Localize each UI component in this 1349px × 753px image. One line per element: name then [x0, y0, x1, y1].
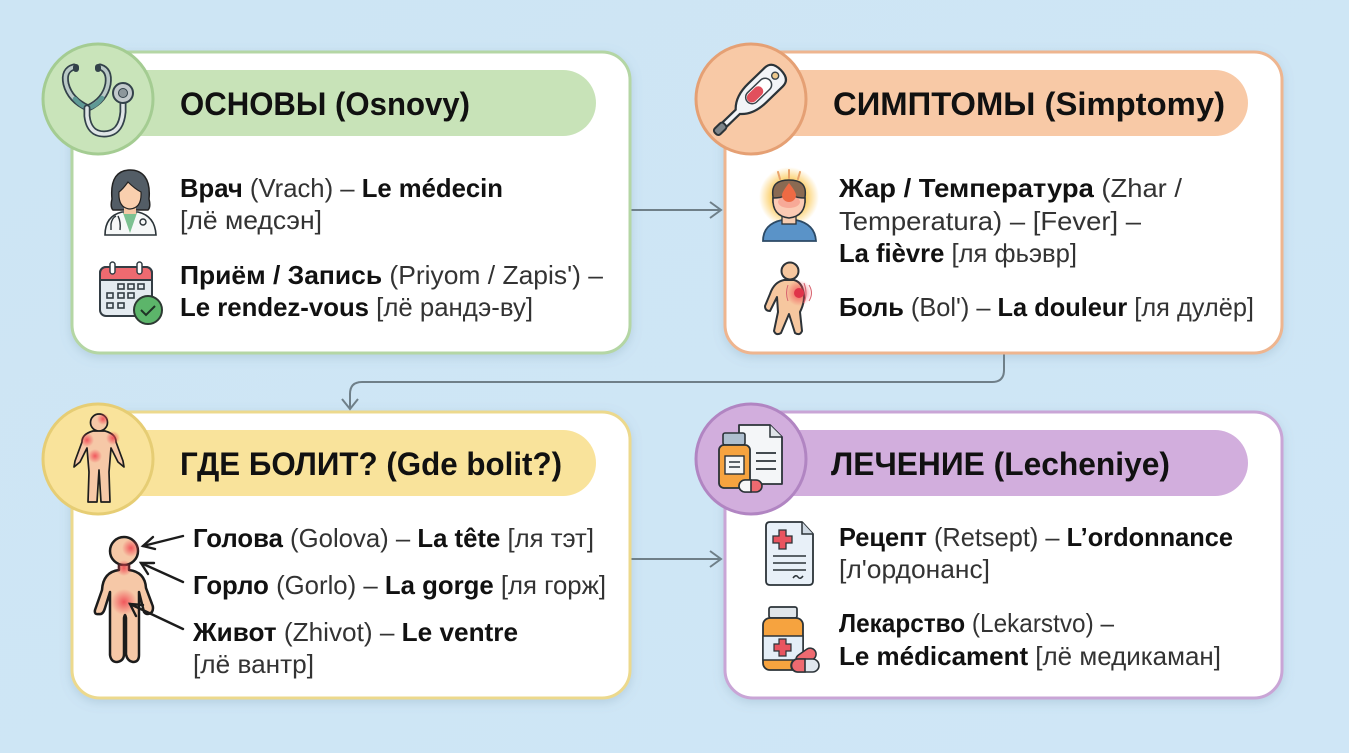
text: appointment: Приём / Запись (Priyom / Zapis') – [180, 260, 604, 290]
text: fever line 3: La fièvre [ля фьэвр] [839, 238, 1077, 268]
icon: medicine bottle and pills [763, 607, 819, 672]
heading band: where does it hurt [100, 430, 596, 496]
text: head: Голова (Golova) – La tête [ля тэт] [193, 523, 594, 553]
heading band: symptoms [753, 70, 1248, 136]
text: fever: Жар / Температура (Zhar / [838, 173, 1183, 203]
icon: calendar [100, 262, 162, 324]
text: stomach: Живот (Zhivot) – Le ventre [192, 617, 518, 647]
icon badge: body map [43, 404, 153, 514]
text: doctor: Врач (Vrach) – Le médecin [180, 173, 503, 203]
icon: fever [759, 167, 819, 241]
text: medicine: Лекарство (Lekarstvo) – [839, 608, 1114, 638]
text: throat: Горло (Gorlo) – La gorge [ля горж] [193, 570, 606, 600]
heading band: treatment [753, 430, 1248, 496]
text: fever line 2: Temperatura) – [Fever] – [839, 206, 1142, 236]
diagram: body with labelled pain points [95, 536, 183, 662]
icon: body pain [765, 262, 812, 334]
transcription: stomach: [лё вантр] [193, 649, 314, 679]
text: prescription: Рецепт (Retsept) – L’ordonnance [839, 522, 1233, 552]
text: medicine translation: Le médicament [лё медикаман] [839, 641, 1221, 671]
panel: where does it hurt [43, 404, 630, 698]
panel: symptoms [696, 44, 1282, 353]
arrow: basics to symptoms [631, 202, 721, 218]
heading: where does it hurt: ГДЕ БОЛИТ? (Gde bolit?) [180, 446, 562, 482]
transcription: doctor: [лё медсэн] [180, 205, 322, 235]
arrow: head [143, 536, 183, 549]
icon: doctor [105, 170, 156, 235]
icon badge: stethoscope [43, 44, 153, 154]
panel: treatment [696, 404, 1282, 698]
icon badge: medicine and document [696, 404, 806, 514]
arrow: where it hurts to treatment [631, 551, 721, 567]
heading band: basics [100, 70, 596, 136]
panel: basics [43, 44, 630, 353]
arrow: stomach [130, 604, 183, 629]
arrow: throat [141, 563, 183, 582]
heading: symptoms: СИМПТОМЫ (Simptomy) [833, 86, 1225, 122]
text: pain: Боль (Bol') – La douleur [ля дулёр] [839, 292, 1254, 322]
text: appointment translation: Le rendez-vous [лё рандэ-ву] [180, 292, 533, 322]
heading: basics: ОСНОВЫ (Osnovy) [180, 86, 470, 122]
heading: treatment: ЛЕЧЕНИЕ (Lecheniye) [831, 446, 1170, 482]
arrow: symptoms to where it hurts [342, 354, 1004, 409]
transcription: prescription: [л'ордонанс] [839, 554, 990, 584]
icon badge: thermometer [696, 44, 806, 154]
icon: prescription [766, 522, 813, 585]
